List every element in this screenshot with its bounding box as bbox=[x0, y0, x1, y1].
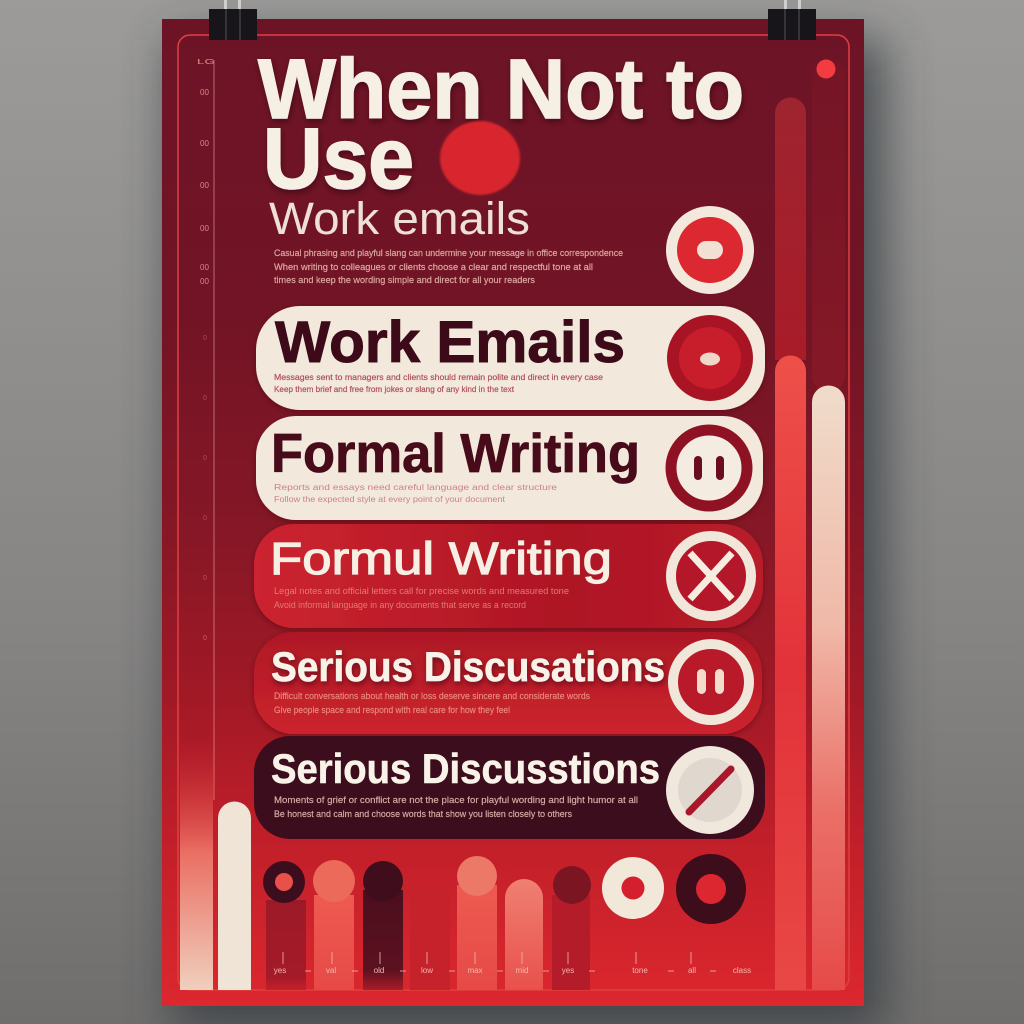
left ruler: 00 bbox=[200, 224, 209, 233]
chart: bottom columns bbox=[263, 854, 751, 990]
title: When Not to bbox=[258, 42, 744, 136]
axis labels bbox=[274, 966, 751, 975]
body: work emails bbox=[274, 372, 603, 394]
body: serious discussions bbox=[274, 691, 590, 715]
status dot bbox=[816, 60, 836, 78]
column 1 bbox=[263, 861, 306, 990]
panel: serious discussions bbox=[254, 632, 762, 734]
binder clip left bbox=[209, 0, 257, 40]
left ruler: 00 bbox=[200, 88, 209, 97]
body: serious discussions: Give people space and respond with real care for how they feel bbox=[274, 705, 510, 715]
column 4 bbox=[410, 885, 450, 990]
icon: pause ring bbox=[671, 430, 747, 506]
poster shadow bbox=[172, 40, 884, 1024]
intro body text: times and keep the wording simple and direct for all your readers bbox=[274, 275, 535, 286]
axis labels: old bbox=[374, 966, 384, 975]
body: serious discussions dark bbox=[274, 795, 638, 819]
axis labels: class bbox=[733, 966, 751, 975]
left ruler: 0 bbox=[203, 575, 207, 582]
axis labels: low bbox=[421, 966, 433, 975]
title: Use bbox=[263, 111, 414, 207]
left cream bar bbox=[218, 802, 251, 990]
body: work emails: Keep them brief and free from jokes or slang of any kind in the text bbox=[274, 384, 515, 394]
body: serious discussions dark: Moments of grief or conflict are not the place for playful wording and light humor at all bbox=[274, 795, 638, 805]
axis labels: mid bbox=[516, 966, 528, 975]
panel: formul writing bbox=[254, 524, 763, 628]
icon: cross bbox=[671, 536, 751, 616]
icon: intro stop button bbox=[666, 206, 754, 294]
left ruler bbox=[197, 59, 215, 800]
axis labels: val bbox=[326, 966, 336, 975]
heading: formal writing: Formal Writing bbox=[271, 422, 640, 484]
body: serious discussions dark: Be honest and calm and choose words that show you listen closely to others bbox=[274, 809, 572, 819]
column 6 bbox=[505, 879, 543, 990]
left ruler: 0 bbox=[203, 455, 207, 462]
subtitle: Work emails bbox=[269, 193, 530, 244]
heading: serious discussions dark: Serious Discusstions bbox=[271, 745, 660, 792]
left ruler: 0 bbox=[203, 335, 207, 342]
column 7 bbox=[552, 866, 591, 990]
right column: cream gradient bar bbox=[812, 386, 845, 990]
column 3 bbox=[363, 861, 403, 990]
axis labels: yes bbox=[562, 966, 574, 975]
inner frame bbox=[178, 35, 849, 990]
column 5 bbox=[457, 856, 497, 990]
title red dot bbox=[440, 121, 520, 195]
axis labels: all bbox=[688, 966, 696, 975]
axis labels: max bbox=[467, 966, 483, 975]
left ruler: LG bbox=[197, 59, 215, 66]
body: formul writing: Avoid informal language in any documents that serve as a record bbox=[274, 600, 526, 610]
body: formul writing bbox=[274, 586, 569, 610]
left ruler: 0 bbox=[203, 395, 207, 402]
ring 9 bbox=[676, 854, 746, 924]
body: formal writing bbox=[274, 482, 557, 504]
ring 8 bbox=[602, 857, 664, 919]
intro body text bbox=[274, 248, 623, 286]
left ruler: 0 bbox=[203, 515, 207, 522]
panel: serious discussions dark bbox=[254, 736, 765, 839]
left ruler: 00 bbox=[200, 263, 209, 272]
left ruler: 00 bbox=[200, 139, 209, 148]
left ruler: 0 bbox=[203, 635, 207, 642]
body: serious discussions: Difficult conversations about health or loss deserve sincere and considerate words bbox=[274, 691, 590, 701]
left pale column bbox=[180, 740, 213, 990]
title bbox=[258, 42, 744, 207]
heading: formul writing: Formul Writing bbox=[270, 533, 612, 584]
icon: prohibited slash bbox=[666, 746, 754, 834]
right column: faint upper bar bbox=[812, 60, 845, 390]
body: formal writing: Follow the expected style at every point of your document bbox=[274, 494, 506, 504]
left ruler: 00 bbox=[200, 181, 209, 190]
heading: serious discussions: Serious Discusations bbox=[271, 643, 665, 690]
body: work emails: Messages sent to managers and clients should remain polite and direct in every case bbox=[274, 372, 603, 382]
intro body text: When writing to colleagues or clients choose a clear and respectful tone at all bbox=[274, 262, 593, 273]
axis labels: yes bbox=[274, 966, 286, 975]
axis labels: tone bbox=[632, 966, 648, 975]
panel: formal writing bbox=[256, 416, 763, 520]
poster sheet bbox=[162, 19, 864, 1006]
right column: upper dark red bar bbox=[775, 97, 806, 360]
body: formul writing: Legal notes and official letters call for precise words and measured tone bbox=[274, 586, 569, 596]
binder clip right bbox=[768, 0, 816, 40]
left ruler: 00 bbox=[200, 277, 209, 286]
axis ticks bbox=[283, 952, 716, 971]
body: formal writing: Reports and essays need careful language and clear structure bbox=[274, 482, 557, 492]
icon: pause bbox=[673, 644, 749, 720]
right column: bright main bar bbox=[775, 356, 806, 990]
icon: record button bbox=[667, 315, 753, 401]
intro body text: Casual phrasing and playful slang can undermine your message in office correspondence bbox=[274, 248, 623, 259]
heading: work emails: Work Emails bbox=[275, 310, 625, 375]
panel: work emails bbox=[256, 306, 765, 410]
column 2 bbox=[313, 860, 355, 990]
